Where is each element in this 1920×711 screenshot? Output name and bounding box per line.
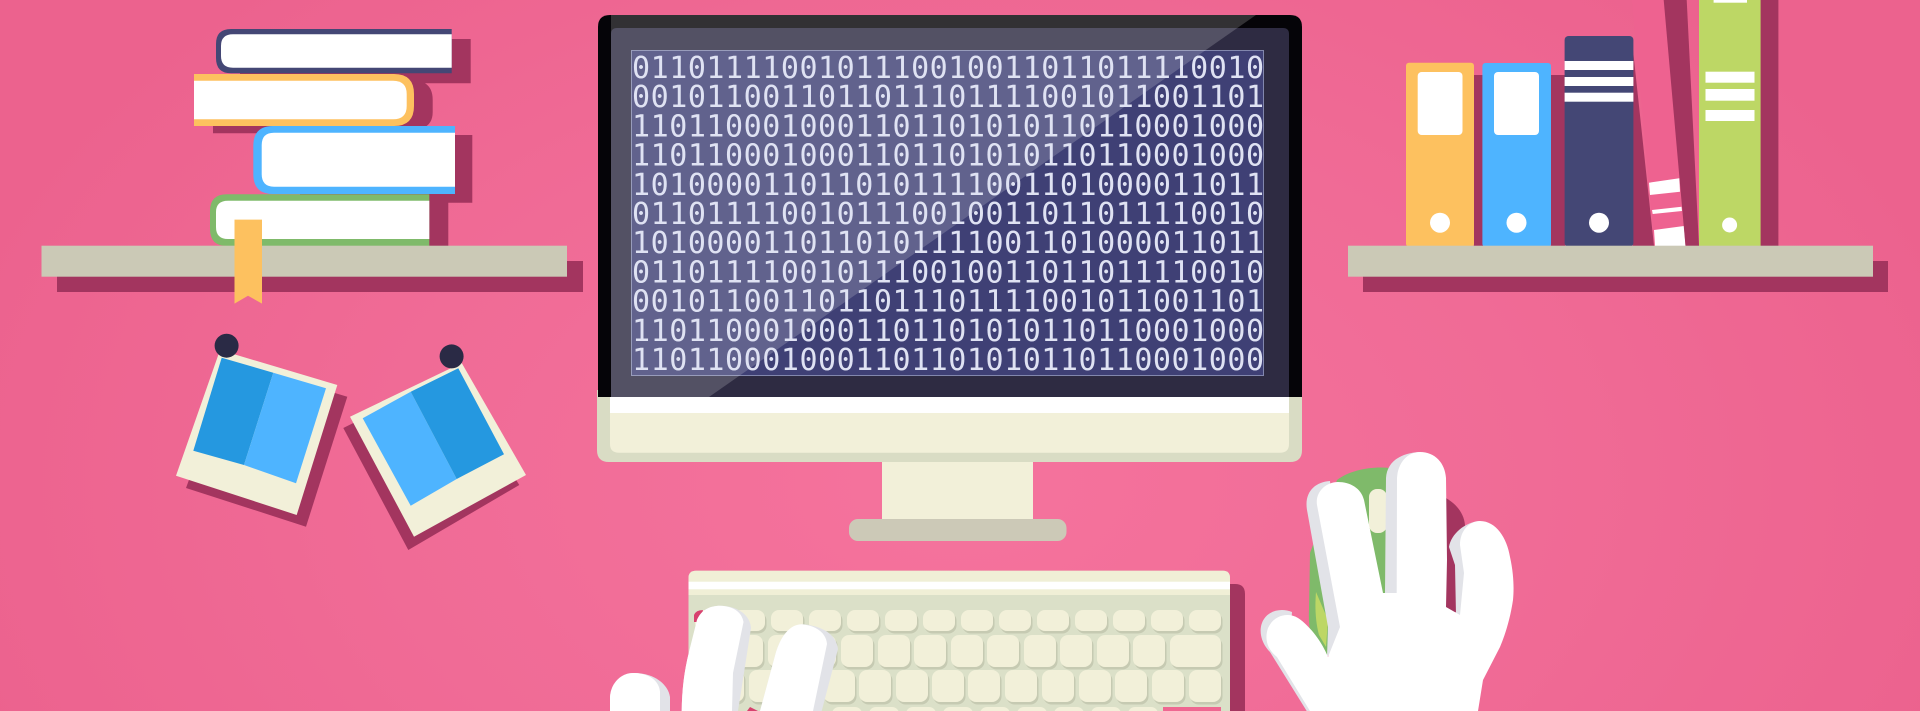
finger one xyxy=(682,606,751,711)
photo dark half xyxy=(411,368,504,479)
screen xyxy=(611,28,1289,397)
book: navy xyxy=(216,29,452,73)
photo frame xyxy=(350,363,526,537)
shelf xyxy=(42,246,567,277)
keys xyxy=(695,610,1222,711)
chin cream xyxy=(610,400,1289,453)
reflection xyxy=(611,15,1256,397)
hand xyxy=(1266,452,1514,711)
photo shadow xyxy=(186,362,347,527)
hand shading xyxy=(1261,452,1480,711)
panel: left shelf with books xyxy=(42,29,583,304)
binary text: 1010000110110101111001101000011011 xyxy=(632,226,1264,261)
book: green xyxy=(210,194,429,246)
binary text xyxy=(632,51,1264,378)
panel: mouse xyxy=(1309,468,1465,657)
shelf xyxy=(1348,246,1873,277)
tall green book shadow xyxy=(1760,0,1778,246)
mouse wheel xyxy=(1369,489,1387,533)
keyboard top band xyxy=(688,571,1230,595)
binary panel xyxy=(632,50,1264,376)
binary text: 0010110011011011101111001011001101 xyxy=(632,285,1264,320)
mouse body xyxy=(1309,468,1447,657)
leaning book shadow xyxy=(1664,0,1699,246)
panel: pinned photo left xyxy=(176,334,347,527)
monitor chin xyxy=(597,390,1302,462)
photo light half xyxy=(244,373,326,483)
bookmark xyxy=(234,220,262,304)
book: yellow xyxy=(194,74,414,126)
panel: keyboard xyxy=(688,571,1245,711)
panel: left hand xyxy=(610,606,838,711)
binary text: 1101100010001101101010110110001000 xyxy=(632,109,1264,144)
chin white strip xyxy=(610,397,1289,413)
monitor stand xyxy=(882,462,1033,519)
panel: pinned photo right xyxy=(343,344,526,550)
keyboard white strip xyxy=(688,582,1230,589)
book shadows xyxy=(213,39,472,246)
binder: navy xyxy=(1565,36,1633,247)
pin xyxy=(215,334,239,358)
arrow key cutout xyxy=(1163,707,1221,711)
binary text: 0010110011011011101111001011001101 xyxy=(632,80,1264,115)
thumb xyxy=(610,673,670,711)
binder shadows xyxy=(1474,50,1654,246)
photo dark half xyxy=(193,358,273,465)
binary text: 1101100010001101101010110110001000 xyxy=(632,343,1264,378)
shelf shadow xyxy=(1363,261,1888,292)
panel: monitor xyxy=(597,15,1302,541)
monitor base xyxy=(849,519,1066,541)
binary text: 0110111100101110010011011011110010 xyxy=(632,51,1264,86)
keyboard shadow xyxy=(1225,584,1245,711)
pin xyxy=(440,344,464,368)
monitor frame xyxy=(598,15,1302,397)
binary text: 0110111100101110010011011011110010 xyxy=(632,255,1264,290)
binary text: 1101100010001101101010110110001000 xyxy=(632,314,1264,349)
binary text: 1101100010001101101010110110001000 xyxy=(632,139,1264,174)
tall green book xyxy=(1699,0,1761,246)
leaning book xyxy=(1632,0,1686,246)
panel: right shelf with binders xyxy=(1348,0,1888,292)
finger two xyxy=(760,624,838,711)
photo light half xyxy=(363,392,457,506)
photo shadow xyxy=(343,375,519,550)
pink gaps by fingers xyxy=(694,610,758,711)
panel: right hand xyxy=(1261,452,1514,711)
keyboard body xyxy=(688,571,1230,711)
binder: yellow xyxy=(1406,63,1474,247)
photo frame xyxy=(176,350,337,515)
book: blue xyxy=(253,126,455,194)
binder: blue xyxy=(1482,63,1551,247)
binary text: 1010000110110101111001101000011011 xyxy=(632,168,1264,203)
shelf shadow xyxy=(57,261,583,292)
binary text: 0110111100101110010011011011110010 xyxy=(632,197,1264,232)
mouse light edge xyxy=(1315,592,1328,647)
mouse shadow xyxy=(1440,495,1465,612)
